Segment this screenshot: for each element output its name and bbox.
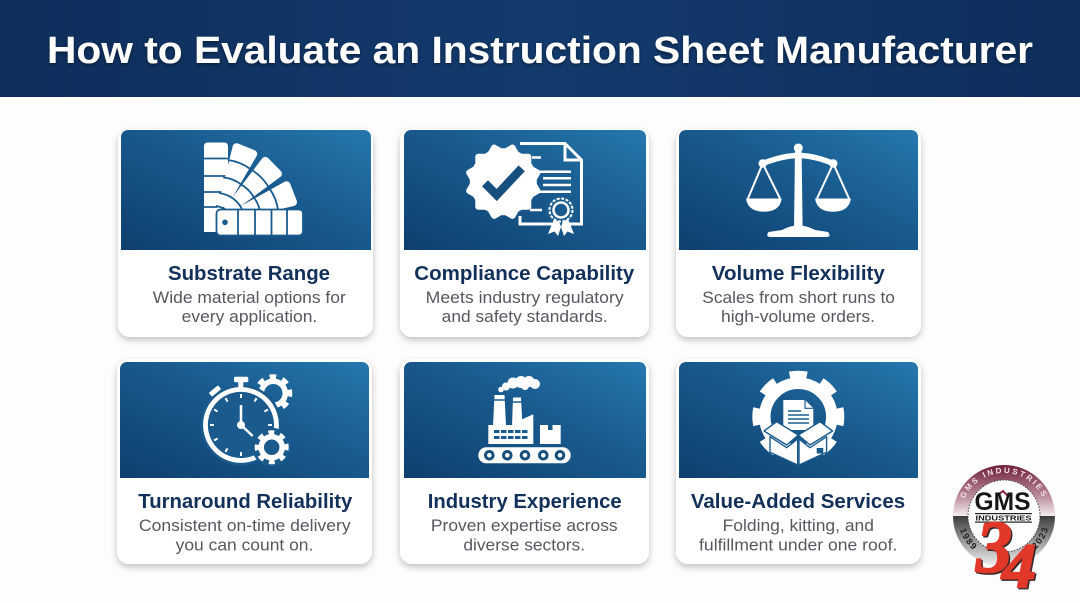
- heading: Value-Added Services: [691, 490, 905, 513]
- description: every application.: [182, 307, 317, 326]
- description: [699, 516, 897, 554]
- heading: Turnaround Reliability: [138, 490, 353, 513]
- description: Meets industry regulatory: [426, 288, 624, 307]
- icon: gear, document and box: [757, 375, 840, 465]
- panel: turnaround reliability: [117, 359, 372, 564]
- logo: GMS Industries 34 years: 1989: [960, 528, 976, 549]
- logo: GMS Industries 34 years: GMS INDUSTRIES: [960, 467, 1047, 498]
- description: Folding, kitting, and: [723, 516, 874, 535]
- description: high-volume orders.: [721, 307, 875, 326]
- icon: stopwatch and gears: [200, 377, 291, 467]
- heading: Industry Experience: [428, 490, 622, 513]
- description: [426, 288, 624, 326]
- description: Scales from short runs to: [702, 288, 895, 307]
- description: [702, 288, 895, 326]
- panel: volume flexibility: [676, 129, 921, 337]
- description: Proven expertise across: [431, 516, 618, 535]
- logo: GMS Industries 34 years: [953, 465, 1055, 601]
- description: [139, 516, 351, 554]
- icon: factory on conveyor: [478, 376, 571, 463]
- logo: GMS Industries 34 years: 4: [1001, 530, 1036, 601]
- description: [153, 288, 346, 326]
- logo: GMS Industries 34 years: INDUSTRIES: [976, 514, 1032, 522]
- icon: balance scale: [746, 144, 851, 237]
- panel: substrate range: [118, 129, 373, 337]
- heading: Compliance Capability: [414, 262, 635, 285]
- description: Wide material options for: [153, 288, 346, 307]
- logo: GMS Industries 34 years: GMS: [974, 488, 1030, 516]
- description: [431, 516, 618, 554]
- heading: Substrate Range: [168, 262, 330, 285]
- panel: value-added services: [676, 359, 921, 564]
- panel: industry experience: [400, 359, 649, 564]
- description: Consistent on-time delivery: [139, 516, 351, 535]
- description: diverse sectors.: [463, 536, 585, 554]
- panel: compliance capability: [400, 129, 649, 337]
- icon: swatch fan: [204, 142, 303, 236]
- title: How to Evaluate an Instruction Sheet Manufacturer: [47, 30, 1033, 72]
- description: fulfillment under one roof.: [699, 536, 897, 554]
- description: you can count on.: [176, 536, 313, 554]
- icon: certificate with badge: [465, 143, 582, 236]
- logo: GMS Industries 34 years: 3: [975, 507, 1012, 589]
- logo: GMS Industries 34 years: 2023: [1032, 528, 1048, 550]
- description: and safety standards.: [442, 307, 608, 326]
- header banner: [0, 0, 1080, 97]
- heading: Volume Flexibility: [712, 262, 885, 285]
